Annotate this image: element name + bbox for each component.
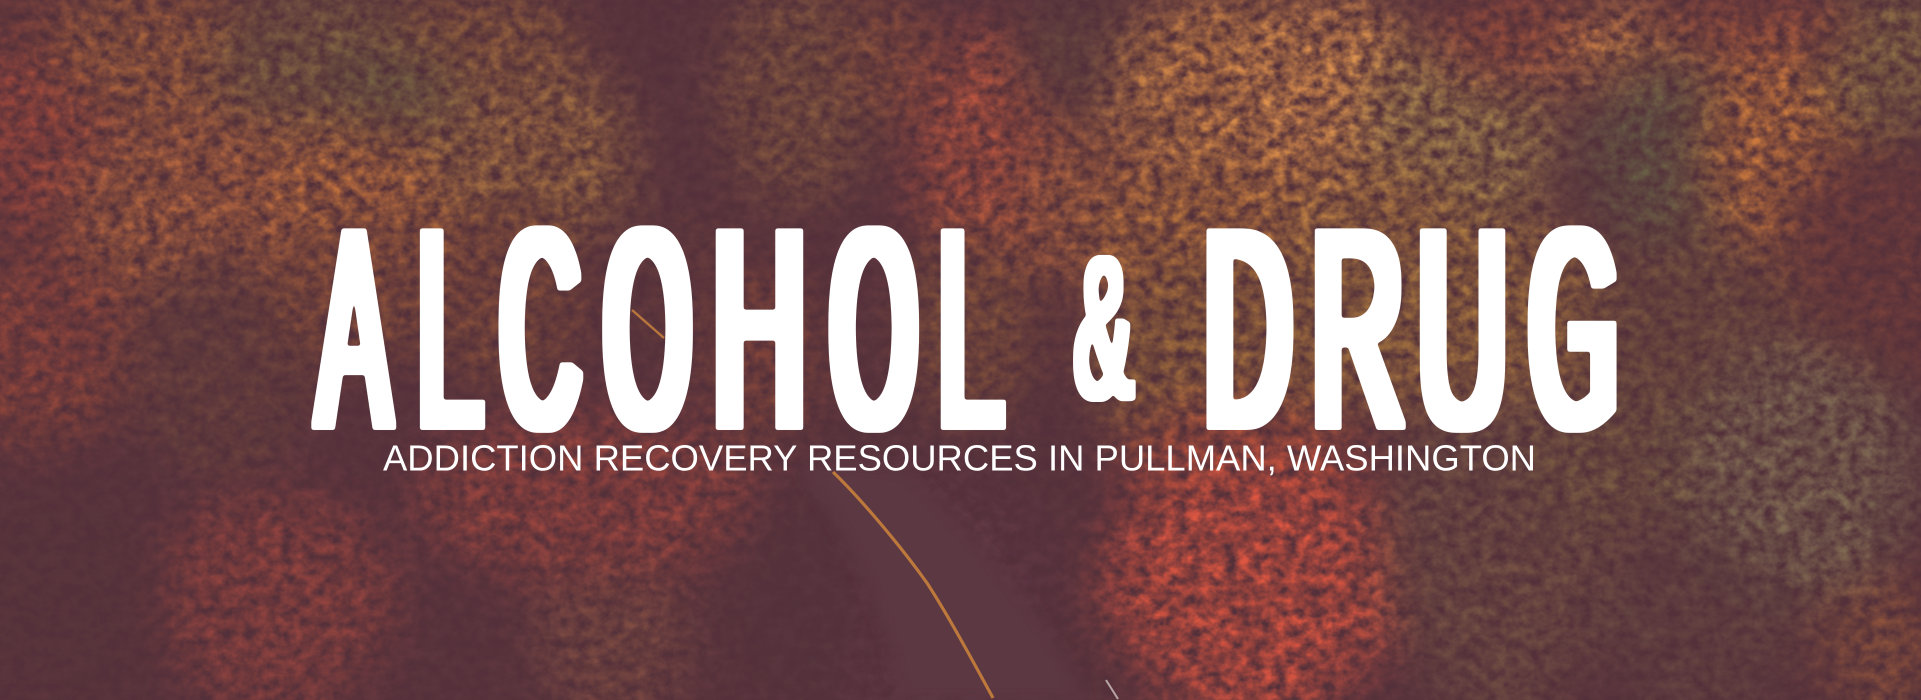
title word: ALCOHOL: O <box>600 182 695 515</box>
road centre line <box>833 472 993 698</box>
title: ALCOHOL & DRUG <box>317 182 1621 515</box>
road edge marking <box>1106 680 1118 699</box>
title word: ALCOHOL: O <box>827 182 921 515</box>
subtitle: ADDICTION RECOVERY RESOURCES IN PULLMAN, WASHINGTON <box>383 438 1536 478</box>
title word: ALCOHOL: L <box>932 182 1008 515</box>
title word: ALCOHOL <box>317 182 1008 515</box>
title word: ALCOHOL: L <box>411 182 487 515</box>
title word: ALCOHOL: A <box>317 182 391 515</box>
title word: DRUG: DRUG <box>1200 182 1621 515</box>
title word: ALCOHOL: H <box>708 182 811 515</box>
road surface <box>800 462 1085 700</box>
title ampersand: & <box>1075 224 1134 461</box>
title word: ALCOHOL: C <box>496 182 583 515</box>
